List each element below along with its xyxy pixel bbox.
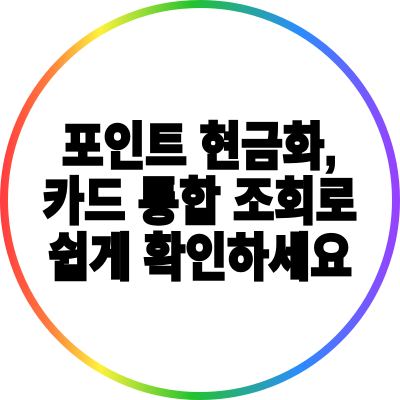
title — [43, 118, 357, 286]
title line 2: 카드 통합 조회로 — [43, 174, 357, 230]
title line 1: 포인트 현금화, — [62, 118, 337, 176]
title line 3: 쉽게 확인하세요 — [48, 230, 352, 286]
